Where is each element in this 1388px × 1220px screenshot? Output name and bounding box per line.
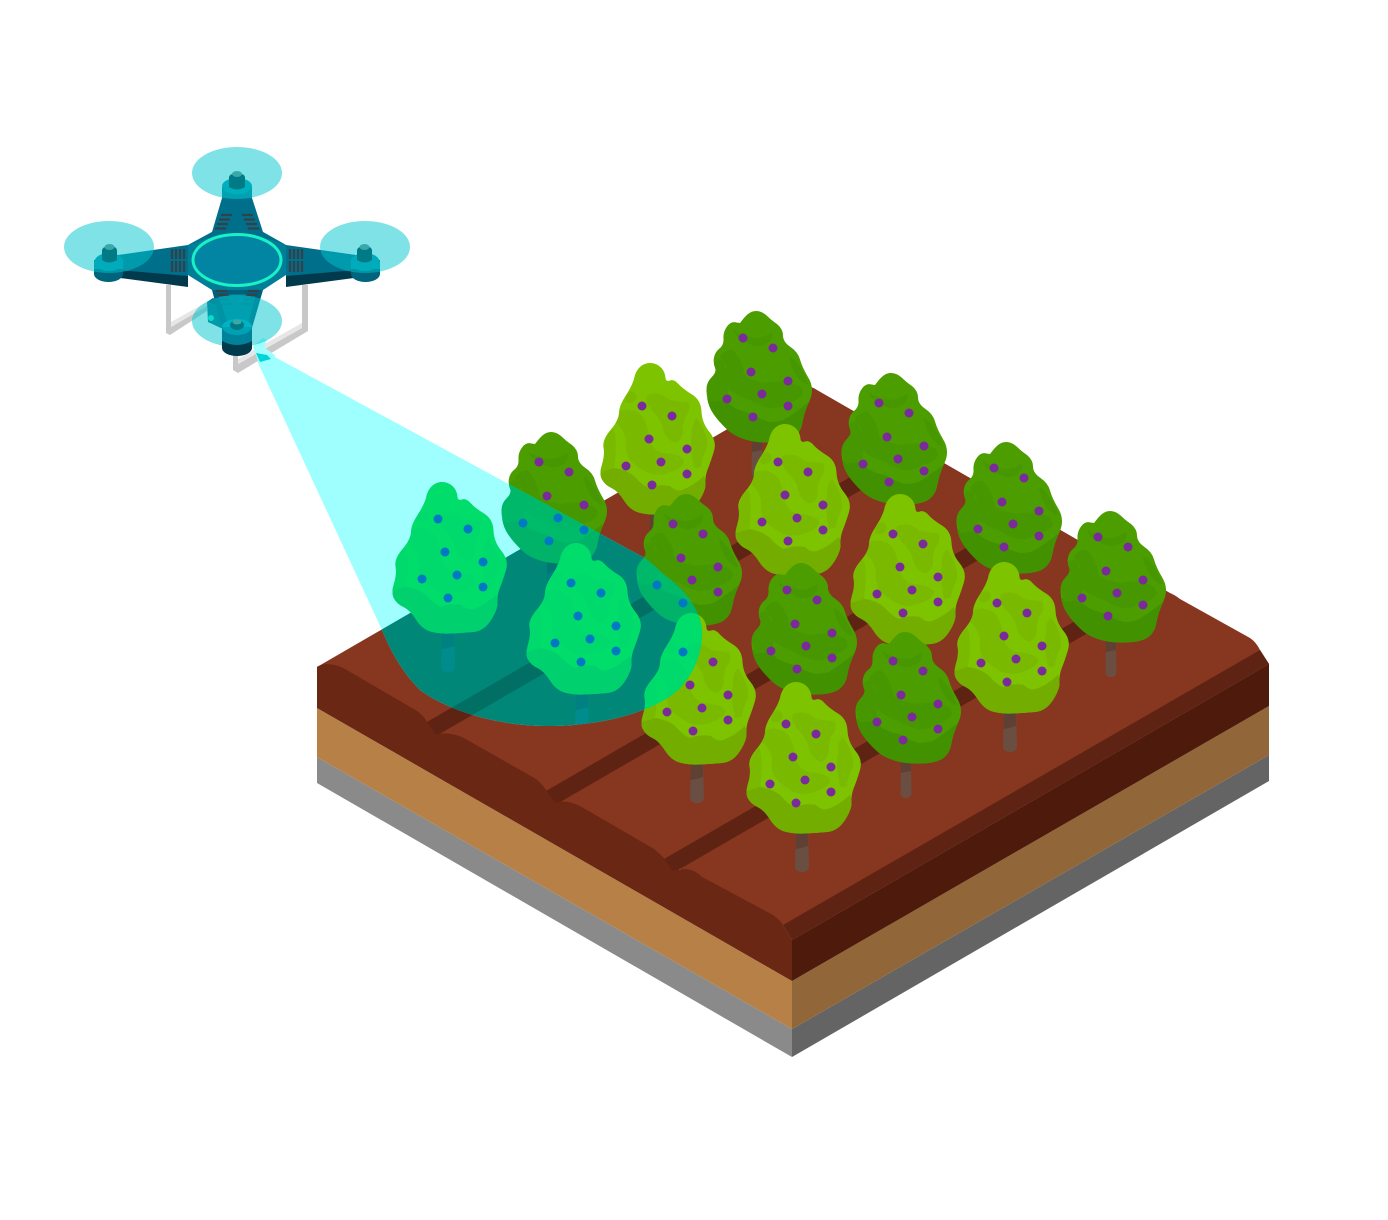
rotor hubs <box>102 171 372 330</box>
glowing top ring <box>193 234 281 286</box>
spinning rotor discs <box>64 147 410 346</box>
grey bedrock layer <box>317 755 1269 1057</box>
dark tree <box>696 311 816 477</box>
light tree <box>841 494 971 684</box>
tan subsoil layer <box>317 706 1269 1029</box>
scanned dark tree <box>636 558 702 626</box>
beam source sliver <box>253 338 276 362</box>
light tree <box>737 682 867 872</box>
landing gear <box>166 285 308 373</box>
scanned dark tree <box>501 484 600 573</box>
light tree <box>632 613 762 803</box>
dark tree <box>831 373 951 539</box>
drone arms <box>118 198 356 328</box>
arm undersides <box>120 198 354 287</box>
dark tree <box>1050 511 1170 677</box>
light tree <box>591 363 721 553</box>
drone body <box>188 232 286 290</box>
dark tree <box>741 563 861 729</box>
dark right soil face <box>792 664 1269 981</box>
furrows between rows <box>427 443 1162 873</box>
dark tree <box>491 432 611 598</box>
dark tree <box>626 494 746 660</box>
light tree <box>945 562 1075 752</box>
dark tree <box>946 442 1066 608</box>
orchard trees <box>491 311 1170 872</box>
motors <box>94 178 380 356</box>
scanned light tree <box>526 543 641 725</box>
scalloped front soil mounds <box>317 664 792 981</box>
soil block <box>317 386 1269 1057</box>
camera <box>207 298 229 329</box>
right soil bevel <box>783 650 1269 940</box>
scanned light tree <box>644 613 702 710</box>
drone <box>64 147 410 373</box>
scanning beam with highlighted trees <box>254 354 702 726</box>
dark tree <box>845 632 965 798</box>
scanned light tree <box>392 482 507 672</box>
air vents <box>172 215 302 304</box>
field top surface <box>317 386 1269 940</box>
light tree <box>726 424 856 614</box>
